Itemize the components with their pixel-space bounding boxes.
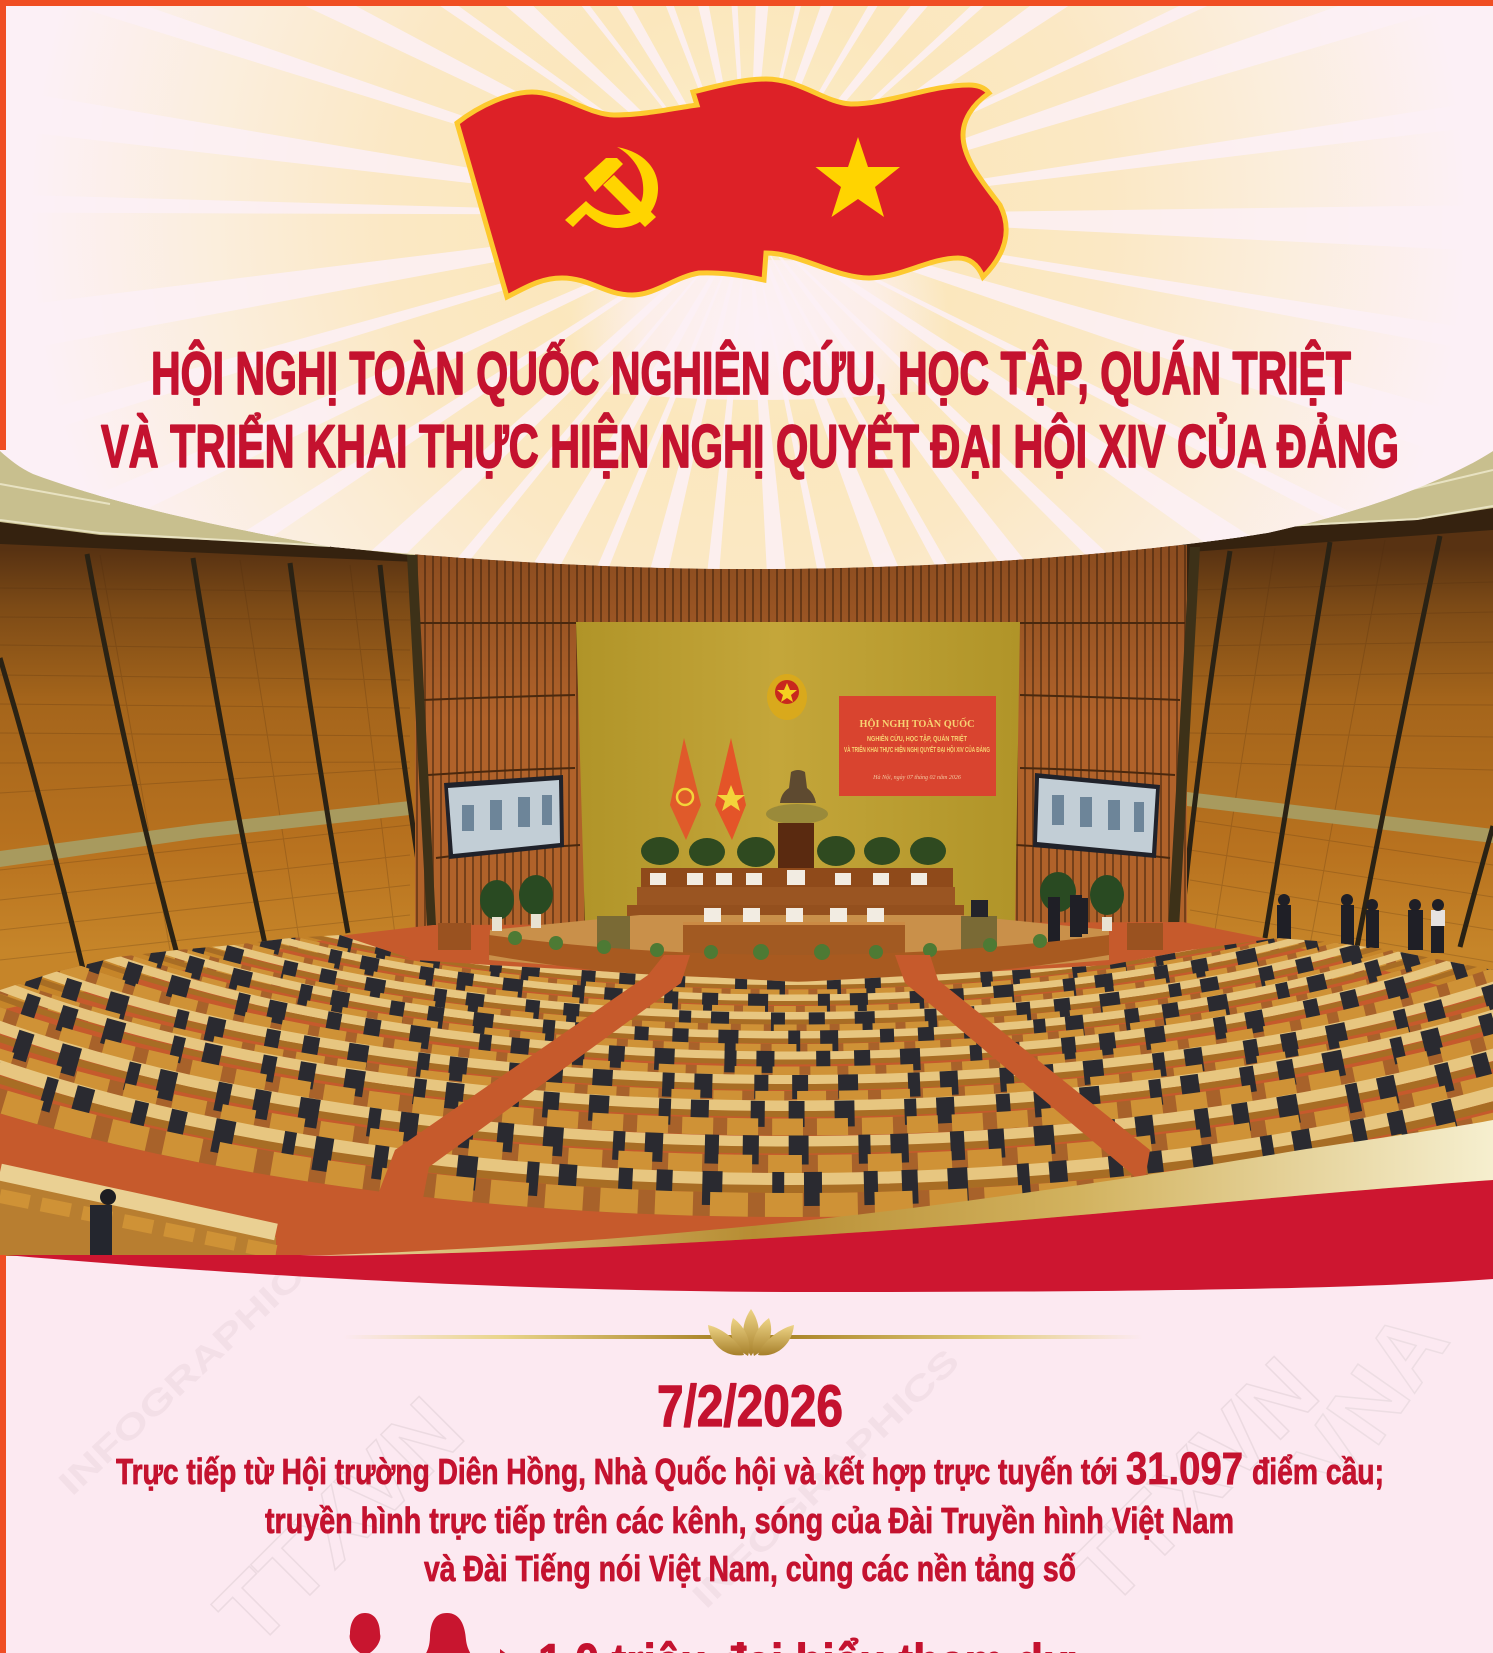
right screen [1033, 773, 1160, 858]
row 8 [0, 1020, 1493, 1173]
star [816, 137, 900, 217]
icon: arrow [500, 1649, 508, 1653]
speaker [971, 900, 988, 917]
description text: điểm cầu; [1252, 1451, 1384, 1492]
left border lower [0, 1255, 6, 1653]
row 5 [56, 956, 1493, 1075]
divider with lotus [343, 1309, 1143, 1356]
watermarks [52, 1236, 1468, 1653]
icon: man [350, 1613, 380, 1653]
right aisle carpet [895, 955, 1150, 1190]
flowers [766, 804, 828, 824]
row 7 [0, 985, 1493, 1136]
watermarks: INFOGRAPHICS [685, 1342, 967, 1616]
row 9 [0, 1060, 1493, 1217]
icon: lotus [708, 1309, 794, 1356]
front-left desk row [0, 1172, 276, 1262]
row 2 [218, 938, 1360, 1012]
description text: truyền hình trực tiếp trên các kênh, sóng của Đài Truyền hình Việt Nam [265, 1500, 1234, 1541]
national flag on stage [715, 738, 746, 840]
description text: Trực tiếp từ Hội trường Diên Hồng, Nhà Quốc hội và kết hợp trực tuyến tới [116, 1451, 1118, 1492]
centre wood wall [415, 545, 1187, 935]
watermarks: VNA [1273, 1294, 1468, 1511]
red banner: HỘI NGHỊ TOÀN QUỐC [860, 717, 975, 730]
dark columns [407, 547, 1200, 947]
right wall [1172, 530, 1493, 1000]
cabinets [438, 923, 1163, 950]
left wall [0, 544, 437, 1010]
row 3 [165, 944, 1402, 1031]
soffit [0, 508, 1493, 599]
red banner [839, 696, 996, 796]
row 1 [281, 935, 1305, 994]
carpet floor [0, 922, 1493, 1254]
watermarks: TTXVN [1052, 1339, 1337, 1624]
seating rows [0, 935, 1493, 1217]
rostrum column [778, 823, 814, 868]
ceiling right [1296, 451, 1493, 526]
stage front wall [489, 935, 1109, 982]
staff standing at right [1277, 894, 1445, 953]
bust [780, 770, 816, 803]
red banner: NGHIÊN CỨU, HỌC TẬP, QUÁN TRIỆT [867, 734, 968, 743]
title [101, 340, 1399, 480]
row 6 [0, 972, 1493, 1100]
floor plants left [480, 875, 553, 931]
stage plants [508, 931, 1047, 960]
photo: national assembly hall [0, 451, 1493, 1256]
red and gold swoosh [6, 1120, 1493, 1292]
icon: woman [425, 1613, 471, 1653]
top panel: pink dome with sun rays [0, 0, 1493, 935]
golden panel [576, 622, 1020, 925]
description text: 31.097 [1126, 1443, 1243, 1494]
floor plants right [1040, 872, 1124, 931]
left aisle carpet [270, 955, 690, 1262]
red banner: VÀ TRIỂN KHAI THỰC HIỆN NGHỊ QUYẾT ĐẠI HỘI XIV CỦA ĐẢNG [844, 744, 990, 754]
party flag [457, 79, 1006, 297]
red banner: Hà Nội, ngày 07 tháng 02 năm 2026 [872, 775, 961, 781]
description text [116, 1443, 1384, 1589]
flag cloth [457, 79, 1006, 297]
ceiling left [0, 451, 415, 555]
camera crew on stage [1048, 895, 1088, 943]
lecterns [597, 916, 997, 952]
description text: và Đài Tiếng nói Việt Nam, cùng các nền tảng số [424, 1548, 1076, 1589]
date: 7/2/2026 [657, 1374, 843, 1439]
hammer and sickle [565, 147, 658, 228]
top border [0, 0, 1493, 6]
state emblem [767, 674, 807, 720]
row 4 [104, 950, 1450, 1052]
watermarks: INFOGRAPHICS [52, 1236, 333, 1503]
left screen [444, 775, 564, 859]
sun rays [28, 0, 1468, 935]
left border upper [0, 0, 6, 450]
party flag on stage [670, 738, 701, 840]
presidium [489, 868, 1109, 985]
plants on dais [641, 836, 946, 867]
